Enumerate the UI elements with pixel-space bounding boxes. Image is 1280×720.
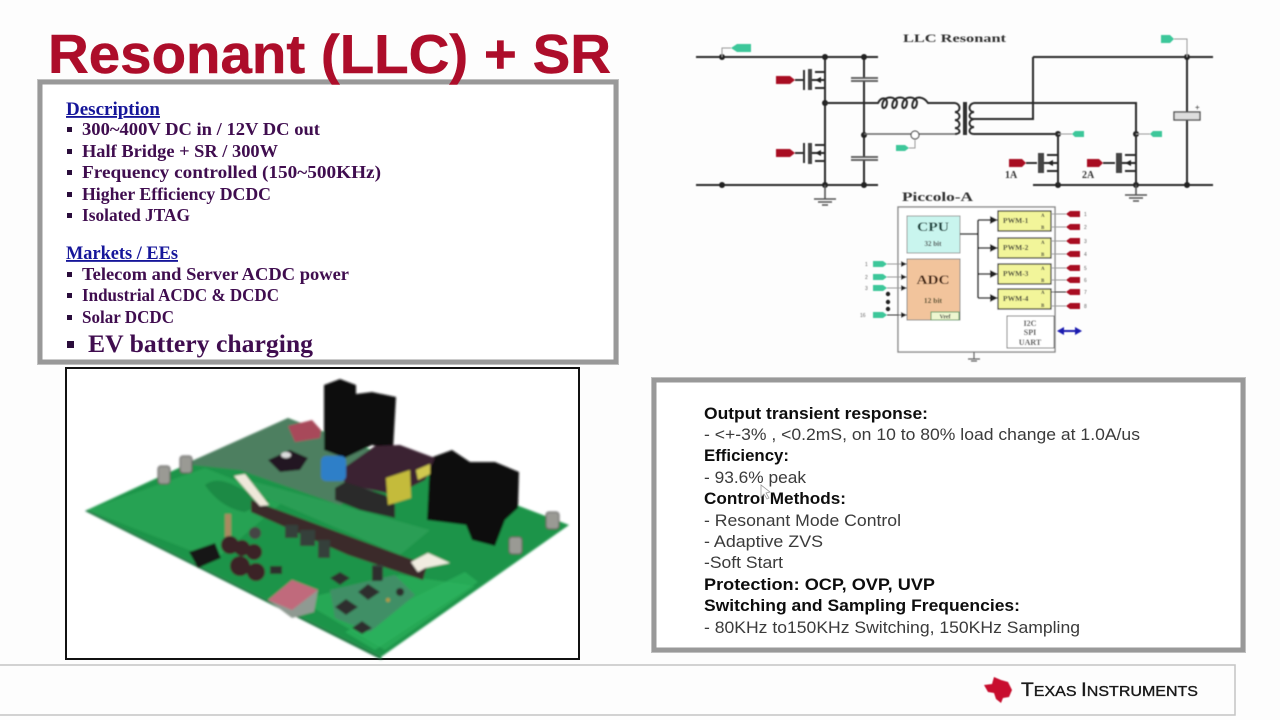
- PWM labels: A: [1041, 241, 1045, 246]
- label 1A: 1A: [1005, 170, 1018, 181]
- PWM labels: [1003, 214, 1045, 309]
- schematic title: LLC Resonant: [903, 31, 1006, 45]
- transformer: [341, 445, 435, 495]
- blue capacitor: [321, 456, 346, 481]
- description list: Isolated JTAG: [82, 205, 190, 225]
- ADC inputs: [860, 261, 907, 319]
- PWM outputs: 2: [1084, 225, 1087, 231]
- PWM labels: PWM-1: [1003, 216, 1029, 225]
- controller box: [898, 207, 1055, 352]
- red header: [288, 420, 321, 442]
- serial interface block: SPI: [1024, 328, 1036, 337]
- PWM outputs: 5: [1084, 266, 1087, 272]
- mouse cursor: [761, 485, 770, 499]
- controller ground: [968, 352, 980, 361]
- ADC block: 12 bit: [924, 296, 943, 305]
- ADC inputs: 2: [865, 275, 868, 281]
- serial bus arrow: [1057, 327, 1082, 335]
- integrated circuits: [270, 566, 404, 634]
- black jack: [189, 543, 221, 568]
- ADC inputs: 16: [860, 313, 866, 319]
- schematic: LLC resonant half bridge with SR: +: [1195, 103, 1200, 112]
- potentiometer: [225, 514, 231, 542]
- mosfet: lower primary: [776, 143, 825, 164]
- PWM outputs: 1: [1084, 212, 1087, 218]
- description list: Frequency controlled (150~500KHz): [82, 162, 381, 183]
- description list: Half Bridge + SR / 300W: [82, 141, 278, 161]
- mosfet: upper primary: [776, 69, 825, 90]
- PWM labels: A: [1041, 267, 1045, 272]
- specification text: Control Methods:: [704, 489, 846, 508]
- small components: [268, 450, 308, 472]
- current sense tag: [896, 140, 915, 151]
- PWM outputs: [1051, 211, 1087, 310]
- description list: 300~400V DC in / 12V DC out: [82, 119, 320, 139]
- ADC block: Vref: [939, 314, 952, 320]
- label 2A: 2A: [1082, 170, 1095, 181]
- diagram: Piccolo-A controller: [860, 189, 1087, 361]
- PWM outputs: 7: [1084, 290, 1087, 296]
- PWM labels: B: [1041, 279, 1045, 284]
- icon: TI map mark: [984, 677, 1012, 703]
- specification text: - 93.6% peak: [704, 468, 806, 487]
- schematic: LLC resonant half bridge with SR: [696, 31, 1213, 205]
- CPU block: [907, 216, 960, 253]
- mounting standoffs: [158, 456, 559, 554]
- PWM labels: PWM-4: [1003, 294, 1029, 303]
- PWM outputs: 3: [1084, 239, 1087, 245]
- markets heading: Markets / EEs: [66, 244, 178, 264]
- transformer: [864, 57, 1136, 185]
- PWM labels: B: [1041, 304, 1045, 309]
- markets list: Solar DCDC: [82, 307, 174, 327]
- panel: performance specifications: [652, 378, 1246, 652]
- PWM labels: A: [1041, 214, 1045, 219]
- PWM outputs: 6: [1084, 278, 1087, 284]
- sense tags: [722, 35, 1187, 137]
- PWM labels: B: [1041, 253, 1045, 258]
- junction dots: [719, 54, 1190, 188]
- PWM outputs: 4: [1084, 252, 1087, 258]
- connector legs: [285, 525, 383, 580]
- yellow inductors: [386, 470, 411, 505]
- serial interface block: UART: [1019, 338, 1042, 347]
- controller title: Piccolo-A: [902, 189, 974, 204]
- photo: LLC evaluation board: [66, 368, 579, 660]
- ADC inputs: 3: [865, 286, 868, 292]
- specification text: Efficiency:: [704, 446, 789, 465]
- printed circuit board: [85, 379, 569, 660]
- description heading: Description: [66, 100, 161, 120]
- PWM blocks: [998, 211, 1051, 309]
- USB connector: [268, 580, 318, 618]
- PWM labels: A: [1041, 291, 1045, 296]
- specification text: - Resonant Mode Control: [704, 511, 901, 530]
- mosfet: synchronous rectifier 2A: [1087, 153, 1136, 173]
- ADC block: ADC: [916, 272, 950, 287]
- current sense: [911, 131, 919, 139]
- heatsink: [324, 379, 396, 458]
- CPU block: 32 bit: [925, 240, 942, 248]
- bus arrows: [960, 216, 998, 302]
- logo wordmark: TEXAS INSTRUMENTS: [1021, 680, 1198, 701]
- specification text: - Adaptive ZVS: [704, 532, 823, 551]
- long connector: [251, 500, 427, 580]
- PWM outputs: 8: [1084, 304, 1087, 310]
- description list: [67, 119, 381, 225]
- heatsink: [427, 450, 519, 546]
- specification text: - 80KHz to150KHz Switching, 150KHz Sampling: [704, 618, 1080, 637]
- logo: Texas Instruments: [984, 677, 1198, 703]
- ADC block: [907, 259, 960, 320]
- capacitors: [851, 78, 878, 160]
- markets list: Industrial ACDC & DCDC: [82, 285, 279, 305]
- PWM labels: PWM-3: [1003, 269, 1029, 278]
- markets list: EV battery charging: [88, 331, 313, 358]
- CPU block: CPU: [917, 219, 950, 234]
- connector ejectors: [234, 474, 269, 506]
- panel: description and markets: [38, 80, 618, 364]
- ADC inputs: 1: [865, 262, 868, 268]
- specification text: [704, 404, 1140, 637]
- ground symbols: [814, 185, 1147, 205]
- specification text: Switching and Sampling Frequencies:: [704, 596, 1020, 615]
- footer bar: [0, 665, 1235, 715]
- title: Resonant (LLC) + SR: [48, 23, 611, 85]
- markets list: Telecom and Server ACDC power: [82, 264, 349, 284]
- electrolytic capacitors: [221, 527, 265, 581]
- markets list: [67, 264, 349, 358]
- specification text: Protection: OCP, OVP, UVP: [704, 575, 935, 594]
- serial interface block: [1007, 316, 1054, 348]
- resonant inductor: [825, 97, 955, 108]
- specification text: - <+-3% , <0.2mS, on 10 to 80% load change at 1.0A/us: [704, 425, 1140, 444]
- serial interface block: I2C: [1024, 319, 1037, 328]
- mosfet: synchronous rectifier 1A: [1009, 153, 1058, 173]
- specification text: Output transient response:: [704, 404, 928, 423]
- specification text: -Soft Start: [704, 553, 783, 572]
- description list: Higher Efficiency DCDC: [82, 184, 271, 204]
- power rails: [696, 57, 1213, 185]
- PWM labels: B: [1041, 226, 1045, 231]
- PWM labels: PWM-2: [1003, 243, 1029, 252]
